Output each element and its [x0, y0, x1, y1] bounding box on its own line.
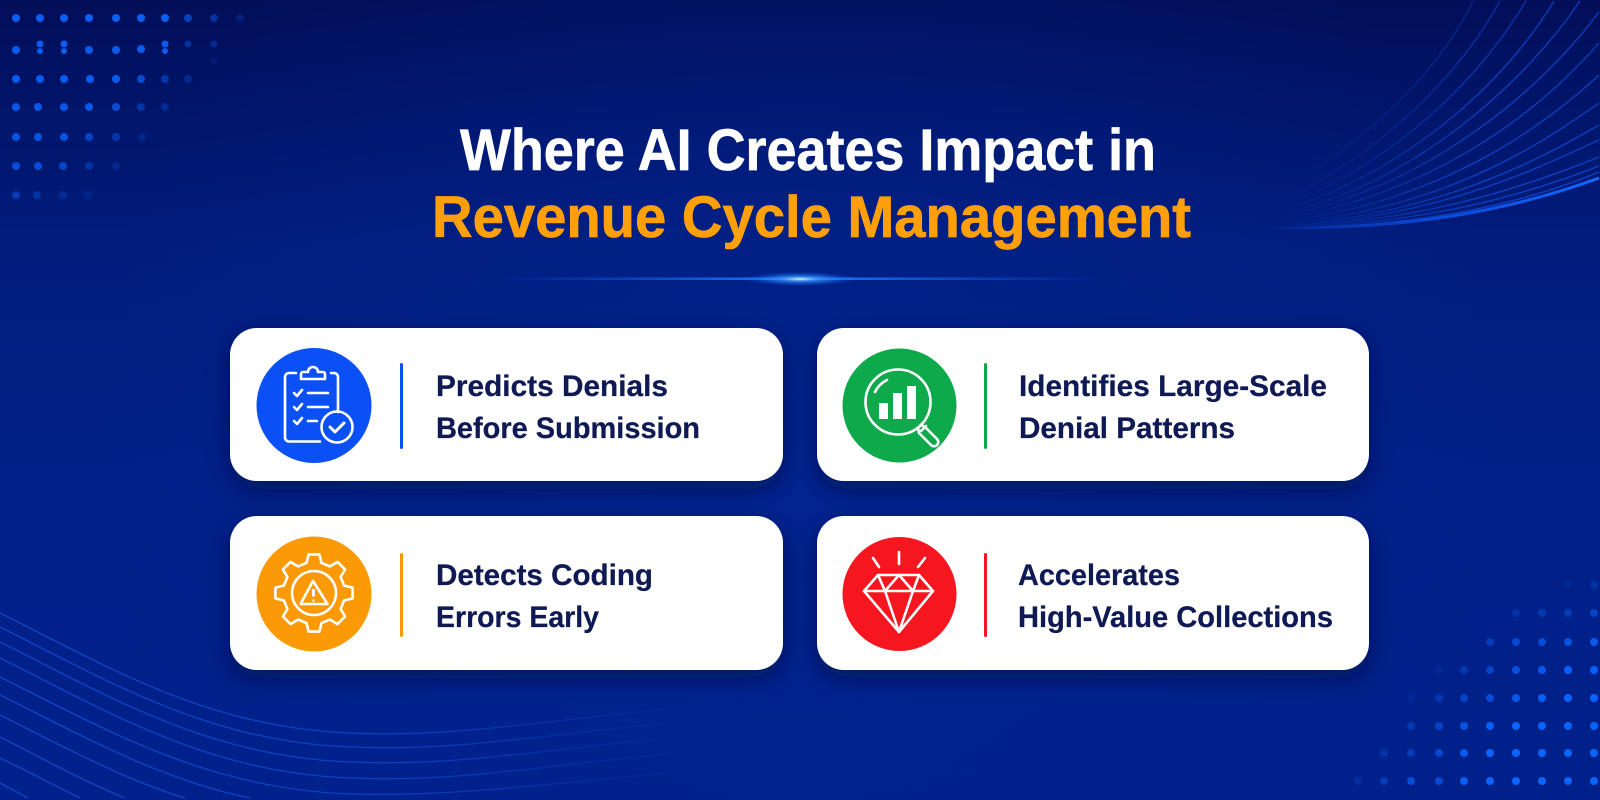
- card: accelerates collections: [817, 516, 1369, 670]
- title line 2: Revenue Cycle Management: [432, 185, 1191, 250]
- divider: [984, 553, 987, 637]
- wave lines: bottom left: [0, 613, 680, 798]
- card text: Predicts Denials: [436, 370, 668, 403]
- glowing divider: [500, 272, 1100, 286]
- card text: Identifies Large-Scale: [1019, 370, 1327, 403]
- icon: gear with warning: [256, 536, 372, 652]
- wave lines: top right: [1265, 1, 1599, 228]
- title line 1: Where AI Creates Impact in: [460, 118, 1156, 183]
- title: [432, 118, 1191, 250]
- dot pattern: bottom right: [1354, 581, 1598, 785]
- card text: High-Value Collections: [1018, 601, 1333, 634]
- card text: [1019, 370, 1327, 445]
- card: predicts denials: [230, 328, 783, 481]
- divider: [400, 363, 403, 449]
- card: detects coding errors: [230, 516, 783, 670]
- card text: [436, 559, 653, 634]
- card text: Accelerates: [1018, 559, 1180, 592]
- card text: [436, 370, 700, 445]
- icon: diamond: [842, 537, 956, 651]
- card text: Before Submission: [436, 412, 700, 445]
- card text: [1018, 559, 1333, 634]
- icon: clipboard with check: [256, 348, 372, 463]
- dot pattern: top left: [12, 14, 244, 199]
- divider: [400, 553, 403, 637]
- icon: magnifier with bars: [842, 348, 956, 462]
- divider: [984, 363, 987, 449]
- card: identifies patterns: [817, 328, 1369, 481]
- card text: Errors Early: [436, 601, 599, 634]
- card text: Denial Patterns: [1019, 412, 1235, 445]
- card text: Detects Coding: [436, 559, 653, 592]
